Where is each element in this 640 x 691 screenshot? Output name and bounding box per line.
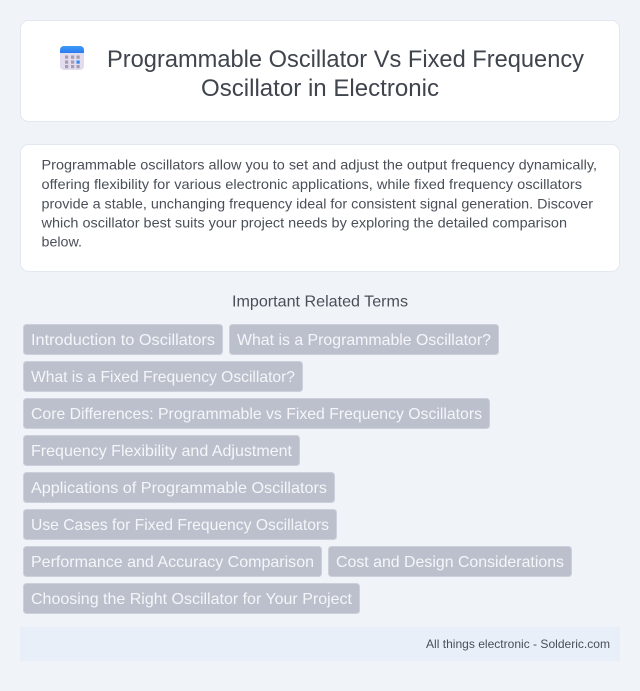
tag list <box>24 324 572 614</box>
tag: programmable oscillator: What is a Programmable Oscillator? <box>237 332 491 349</box>
tag: cost and design <box>328 546 572 576</box>
description text: which oscillator best suits your project needs by exploring the detailed comparison <box>40 214 567 230</box>
description text: below. <box>42 234 82 250</box>
description text: provide a stable, unchanging frequency ideal for consistent signal generation. Discover <box>42 196 593 212</box>
description text: Programmable oscillators allow you to set and adjust the output frequency dynamically, <box>42 156 597 172</box>
tag: applications: Applications of Programmable Oscillators <box>31 480 327 497</box>
tag: introduction: Introduction to Oscillators <box>31 332 215 349</box>
description text: offering flexibility for various electronic applications, while fixed frequency oscillators <box>42 176 582 192</box>
tag: core differences: Core Differences: Programmable vs Fixed Frequency Oscillators <box>31 406 482 423</box>
title <box>107 46 584 102</box>
tag: choosing <box>24 584 360 614</box>
footer credit: All things electronic - Solderic.com <box>426 637 610 651</box>
tag: fixed frequency oscillator: What is a Fixed Frequency Oscillator? <box>31 369 295 386</box>
tag: performance: Performance and Accuracy Comparison <box>31 554 314 571</box>
tag: programmable oscillator <box>230 324 498 354</box>
icon: calendar grid <box>60 46 84 70</box>
title: Oscillator in Electronic <box>201 75 439 102</box>
heading: important related terms: Important Related Terms <box>232 294 408 310</box>
footer bar <box>20 627 620 661</box>
tag: core differences <box>24 398 490 428</box>
tag: cost and design: Cost and Design Considerations <box>336 554 564 571</box>
description text <box>40 156 597 250</box>
tag: introduction <box>24 324 222 354</box>
tag: applications <box>24 472 334 502</box>
tag: frequency flexibility: Frequency Flexibility and Adjustment <box>31 443 293 460</box>
tag: use cases <box>24 510 336 540</box>
tag: choosing: Choosing the Right Oscillator for Your Project <box>31 591 353 608</box>
description panel <box>20 144 620 272</box>
tag: use cases: Use Cases for Fixed Frequency Oscillators <box>31 517 329 534</box>
title: Programmable Oscillator Vs Fixed Frequency <box>107 46 584 73</box>
header panel <box>20 20 620 122</box>
tag: frequency flexibility <box>24 436 300 466</box>
tag: fixed frequency oscillator <box>24 362 302 392</box>
tag: performance <box>24 546 322 576</box>
